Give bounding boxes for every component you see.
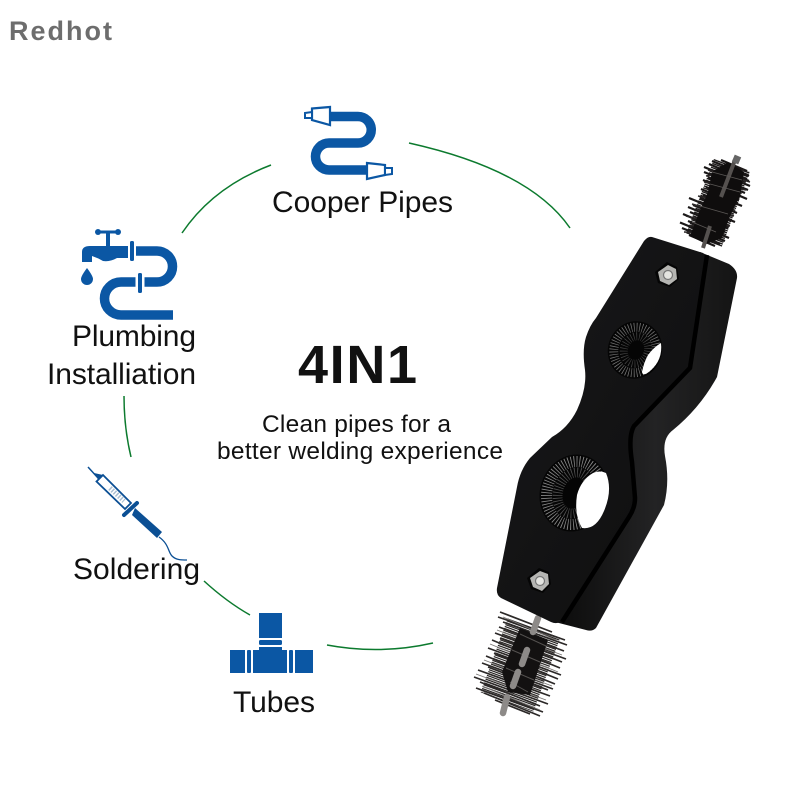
label: Soldering: Soldering: [73, 553, 200, 586]
bottom wire brush: [474, 612, 567, 716]
label: Plumbing Installiation: Installiation: [47, 358, 196, 391]
label: Plumbing Installiation: [47, 320, 196, 391]
label: Cooper Pipes: Cooper Pipes: [272, 186, 453, 219]
description text: better welding experience: [217, 438, 503, 465]
seam line: [562, 255, 707, 622]
icon: soldering iron: [88, 467, 187, 560]
brand label: Redhot: [9, 16, 112, 46]
top wire brush: [680, 156, 750, 248]
top bolt: [655, 262, 679, 287]
bottom hole: [530, 445, 618, 541]
icon: faucet and plumbing: [81, 229, 173, 315]
title: 4IN1: 4IN1: [298, 335, 417, 395]
label: Tubes: Tubes: [233, 686, 315, 719]
icon: copper pipe: [305, 107, 392, 179]
bottom bolt: [527, 568, 551, 593]
top hole: [600, 314, 670, 386]
tool side face: [555, 252, 737, 631]
description text: [217, 411, 503, 465]
icon: T-shaped tube: [230, 613, 313, 673]
circular connector arcs: [124, 143, 570, 650]
label: Plumbing Installiation: Plumbing: [72, 320, 196, 353]
description text: Clean pipes for a: [262, 411, 451, 438]
product: 4-in-1 wire brush tool: [474, 156, 750, 716]
tool front face: [497, 237, 706, 623]
